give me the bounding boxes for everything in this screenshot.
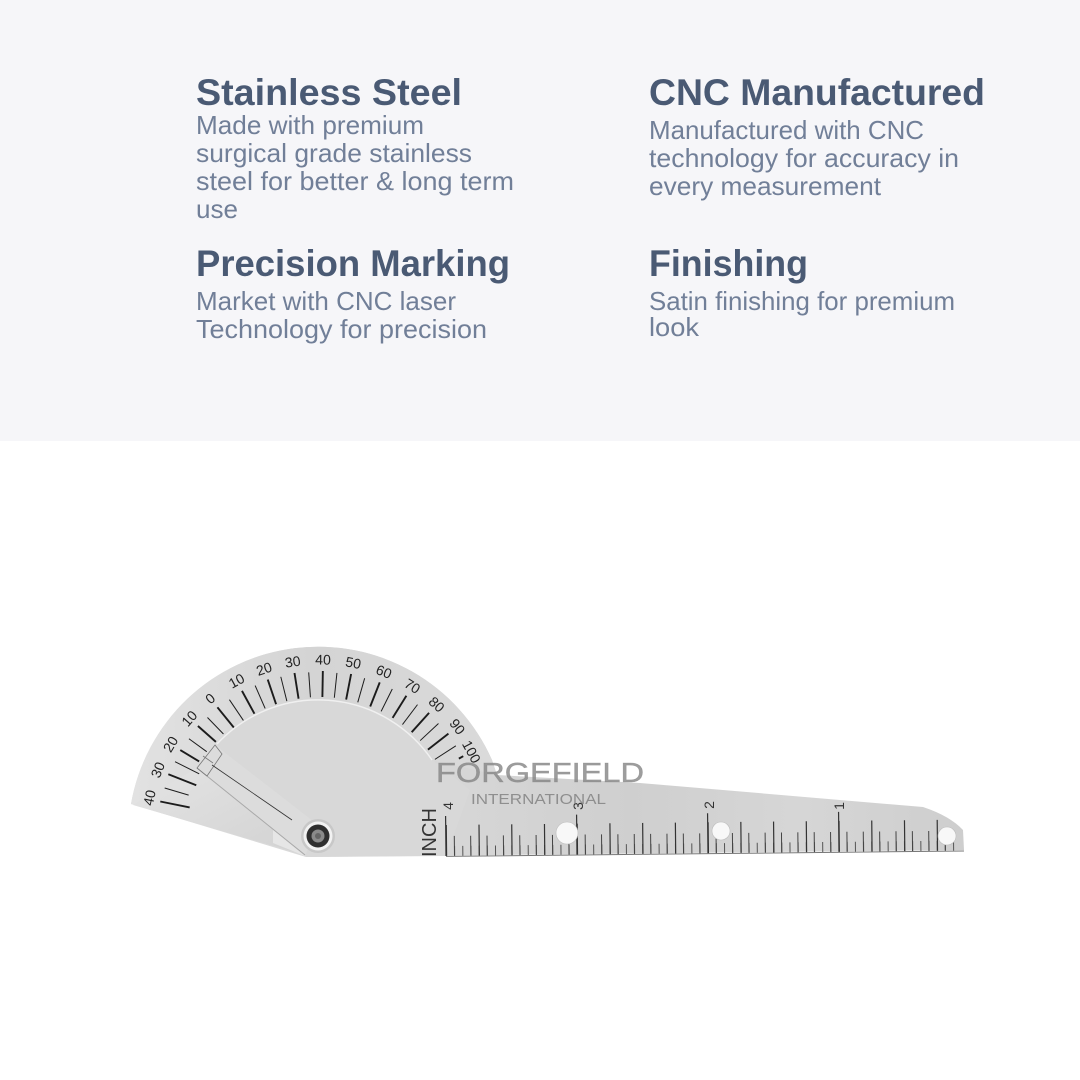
pointer window and hairline [197, 745, 292, 820]
degree labels: 50 [344, 653, 363, 672]
degree labels: 70 [402, 675, 423, 697]
degree labels: 60 [374, 661, 394, 682]
degree labels: 40 [315, 651, 331, 668]
pivot rivet [301, 819, 335, 853]
feature: CNC manufactured: technology for accuracy in [649, 143, 959, 173]
watermark: Forgefield International: FORGEFIELD [436, 757, 644, 788]
ruler labels: 2 [701, 801, 717, 809]
degree labels: 0 [202, 690, 218, 707]
ruler labels [419, 801, 847, 857]
feature: precision marking: Market with CNC laser [196, 286, 456, 316]
feature: stainless steel: steel for better & long term [196, 166, 514, 196]
watermark: Forgefield International [436, 757, 644, 808]
arc highlights [217, 700, 432, 760]
feature: precision marking: Precision Marking [196, 243, 510, 284]
feature: precision marking [196, 243, 510, 344]
protractor inner plate [217, 700, 470, 857]
ruler labels: 1 [831, 802, 847, 810]
feature: stainless steel [196, 72, 514, 224]
feature: stainless steel: Stainless Steel [196, 72, 462, 113]
feature: CNC manufactured [649, 72, 985, 201]
product: goniometer ruler [131, 647, 964, 857]
feature: finishing: Satin finishing for premium [649, 286, 955, 316]
feature: stainless steel: surgical grade stainless [196, 138, 472, 168]
degree labels: 30 [147, 759, 168, 780]
ruler labels: 3 [570, 802, 586, 810]
ruler labels: 4 [440, 802, 456, 810]
degree labels [140, 651, 484, 807]
feature: finishing: look [649, 312, 700, 342]
degree labels: 10 [226, 670, 247, 692]
feature: finishing: Finishing [649, 243, 808, 284]
feature: CNC manufactured: CNC Manufactured [649, 72, 985, 113]
inch ruler scale [446, 811, 964, 856]
ruler holes [556, 822, 956, 845]
protractor head and ruler body [131, 647, 964, 857]
degree labels: 90 [446, 716, 469, 738]
feature: CNC manufactured: Manufactured with CNC [649, 115, 924, 145]
degree labels: 20 [160, 733, 181, 755]
degree labels: 100 [459, 738, 484, 766]
feature: stainless steel: Made with premium [196, 110, 424, 140]
panel: features [0, 0, 1080, 441]
feature: CNC manufactured: every measurement [649, 171, 882, 201]
degree ticks [160, 671, 463, 807]
feature: stainless steel: use [196, 194, 238, 224]
ruler labels: INCH [419, 808, 441, 857]
degree labels: 10 [178, 707, 201, 730]
degree labels: 80 [426, 693, 448, 716]
feature: precision marking: Technology for precision [196, 314, 487, 344]
watermark: Forgefield International: INTERNATIONAL [471, 792, 606, 808]
feature: finishing [649, 243, 955, 342]
pointer arm [133, 768, 305, 855]
protractor scale ring [131, 647, 497, 812]
degree labels: 30 [284, 652, 302, 671]
degree labels: 40 [140, 788, 159, 807]
degree labels: 20 [254, 659, 274, 679]
